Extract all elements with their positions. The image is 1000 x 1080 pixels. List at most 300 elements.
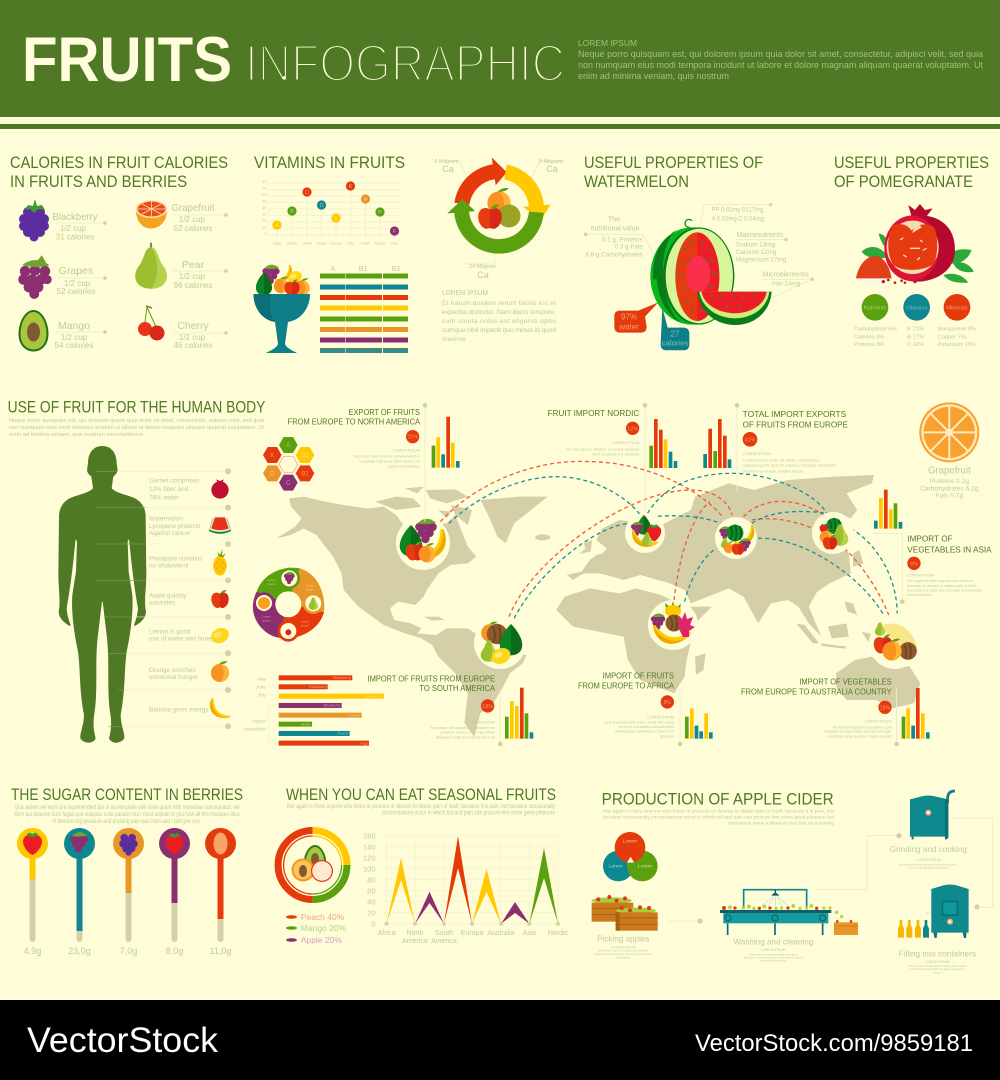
nutrition text: 6.8 g Carbohydrates bbox=[585, 251, 643, 258]
washing text: These cases are perfectly simple and easy to bbox=[748, 954, 799, 957]
grinding text: But in certain circumstances and owing to the claims bbox=[899, 863, 958, 866]
scatter chart: 80 bbox=[262, 180, 266, 184]
panel: fruit donut wheel: Lorem bbox=[301, 619, 310, 623]
heading: watermelon: WATERMELON bbox=[584, 173, 689, 191]
benefit texts: Apple quickly bbox=[149, 593, 187, 600]
callout: 27 calories: 27 bbox=[671, 329, 680, 338]
panel: export to north america bbox=[288, 403, 460, 522]
vitamins table: B1 bbox=[359, 266, 367, 273]
scatter chart: A bbox=[275, 223, 279, 229]
fruit labels: 1/2 cup bbox=[179, 272, 206, 281]
seasonal spike chart: 20 bbox=[367, 908, 376, 918]
panel: import of vegetables in asia: VEGETABLES IN ASIA bbox=[907, 544, 992, 554]
grinding text: LOREM IPSUM bbox=[916, 858, 941, 862]
callout: 27 calories bbox=[661, 308, 689, 350]
nutrition text: PP 0.01mg B117mg bbox=[712, 207, 764, 214]
callout: 97% water bbox=[614, 302, 658, 333]
cider intro text bbox=[603, 809, 835, 827]
heading: calories bbox=[10, 154, 228, 191]
nutrition text: Microelements bbox=[763, 272, 809, 279]
scatter chart: Kiwi bbox=[347, 242, 354, 246]
panel: import of vegetables in asia: circumstances bbox=[907, 593, 932, 597]
picking apples text: In inho piller hand, we do burca with righteous bbox=[598, 950, 649, 953]
benefit texts: emotional hunger bbox=[149, 674, 198, 681]
panel: export to north america: 21% bbox=[407, 435, 418, 441]
intro text: non numquam eius modi tempora incidunt ut labore et dolore magnam aliquam quaerat voluptatem. Ut bbox=[9, 425, 264, 431]
panel: import of vegetables to australia: Nemo enim ipsam voluptatem quia bbox=[833, 725, 892, 729]
fruit labels: 1/2 cup bbox=[179, 215, 206, 224]
cycle labels: Ca bbox=[477, 270, 489, 280]
scatter chart: 10 bbox=[262, 226, 266, 230]
panel: import of fruits to africa: 8% bbox=[663, 700, 671, 706]
panel: fruit donut wheel bbox=[253, 568, 324, 642]
scatter chart: Mango bbox=[375, 242, 385, 246]
icon: mango bbox=[18, 310, 48, 352]
donut legend: Mango 20% bbox=[301, 923, 347, 933]
sugar values: 7,0g bbox=[120, 946, 137, 956]
icon: blackberry bbox=[19, 199, 49, 242]
picking apples text: demoralized bbox=[617, 956, 631, 959]
scatter chart bbox=[262, 179, 400, 246]
nutrition text: 0.3 g Fats bbox=[615, 244, 643, 251]
spoon: raspberry bbox=[159, 828, 190, 942]
icon: banana bbox=[210, 698, 231, 718]
icon: apple crates bbox=[592, 895, 658, 931]
seasonal spike chart: 160 bbox=[363, 832, 376, 840]
benefit texts: 12% fiber and bbox=[149, 486, 189, 493]
panel: import of vegetables in asia: 6% bbox=[910, 561, 918, 567]
callout leader lines bbox=[55, 215, 226, 333]
panel: total import exports: Lorem ipsum dolor sit amet, consectetur bbox=[743, 458, 821, 463]
scatter chart: E bbox=[334, 216, 338, 222]
sugar text: illum qui dolorem eum fugiat quo voluptas nulla pariatur but I must explain to you how all this mistaken idea bbox=[14, 812, 240, 818]
panel: use of fruit for the human body bbox=[8, 398, 265, 743]
panel: vitamins in fruits bbox=[254, 154, 565, 353]
panel: import of vegetables to australia bbox=[741, 677, 930, 746]
icon: apple bbox=[211, 590, 229, 608]
intro text: enim ad minima veniam, quis nostrum exercitationem bbox=[9, 432, 144, 438]
panel: total import exports: LOREM IPSUM bbox=[743, 451, 771, 456]
callout: 97% water: water bbox=[618, 322, 639, 331]
panel: import of fruits to africa: aperiam bbox=[660, 734, 674, 738]
dashed trade routes bbox=[440, 461, 897, 618]
scatter chart: 60 bbox=[262, 193, 266, 197]
scatter chart: Apple bbox=[273, 242, 281, 246]
panel: vitamin hexagons: K bbox=[270, 453, 274, 459]
heading: calories: IN FRUITS AND BERRIES bbox=[10, 173, 187, 191]
scatter chart: K bbox=[349, 184, 353, 190]
cycle labels bbox=[434, 159, 563, 280]
heading: vitamins: VITAMINS IN FRUITS bbox=[254, 154, 405, 172]
nutrition text: Magnesium 17mg bbox=[736, 257, 787, 264]
panel: total import exports: adipiscing elit, sed do eiusmod tempor incididunt bbox=[743, 463, 837, 468]
washing text: LOREM IPSUM bbox=[761, 948, 786, 952]
panel: production of apple cider bbox=[592, 790, 993, 974]
intro text bbox=[9, 418, 265, 438]
panel: import of vegetables in asia: IMPORT OF bbox=[907, 534, 953, 544]
footer watermark bar bbox=[0, 1000, 1000, 1080]
panel: total import exports: ut labore et dolore magna aliqua. bbox=[743, 468, 804, 473]
panel: sugar content in berries bbox=[11, 786, 243, 956]
panel: import of fruits to africa: LOREM IPSUM bbox=[647, 715, 674, 719]
sugar text: Quis autem vel eum iure reprehenderit qui in ea voluptate velit esse quam nihil molestiae consequatur, vel bbox=[14, 805, 240, 811]
seasonal spike chart: Africa bbox=[378, 930, 396, 937]
nutrition text: Calcium 12mg bbox=[736, 249, 777, 256]
vitamins table: B2 bbox=[392, 266, 400, 273]
panel: export to north america: LOREM IPSUM bbox=[393, 449, 420, 453]
nutrition text: 0.1 g. Proteins bbox=[602, 237, 643, 244]
seasonal donut bbox=[278, 830, 347, 900]
panel: export to north america: Duis aute irure dolor in reprehenderit in bbox=[354, 455, 420, 459]
header intro text: LOREM IPSUM bbox=[578, 38, 637, 48]
washing text: Washing and cleaning bbox=[733, 937, 814, 947]
panel: vitamin hexagons: B2 bbox=[301, 471, 309, 477]
filling text: Filling into containers bbox=[899, 949, 976, 959]
benefit texts: Garnet comprises bbox=[149, 478, 199, 485]
header banner bbox=[0, 0, 1000, 129]
nutrition text: The bbox=[608, 217, 620, 224]
nutrition text: nutritional value bbox=[591, 226, 640, 233]
lorem text block: LOREM IPSUM bbox=[442, 288, 488, 297]
panel: import of vegetables in asia: pursues or desires to obtain pain of itself, bbox=[907, 584, 977, 588]
nutrition text: A 0.02mg C 0.04mg bbox=[712, 216, 764, 223]
venn diagram: Lorem bbox=[609, 863, 623, 869]
total bar chart bbox=[703, 419, 731, 468]
benefit texts: Against cancer bbox=[149, 530, 191, 537]
grinding text: Grinding and cooking bbox=[890, 844, 967, 854]
filling text: LOREM IPSUM bbox=[925, 960, 950, 964]
spoon: grape bbox=[64, 828, 95, 942]
footer watermark bar: VectorStock bbox=[27, 1021, 219, 1060]
nutrient values: B 17% bbox=[907, 334, 924, 340]
map fruit badge: australia bbox=[869, 617, 921, 669]
panel: fruit import nordic: No one rejects, dislikes, or avoids pleasure bbox=[567, 448, 639, 452]
scatter chart: 30 bbox=[262, 212, 266, 216]
panel: import of fruits to south america: Excepteur sint occaecat cupidatat non bbox=[430, 726, 495, 730]
seasonal spike chart: 80 bbox=[367, 876, 376, 884]
human silhouette bbox=[58, 446, 146, 743]
lorem text block: maxime bbox=[442, 336, 466, 343]
spoon: strawberry bbox=[17, 828, 48, 942]
washing text bbox=[733, 937, 814, 963]
panel: fruit donut wheel: ipsum bbox=[268, 582, 276, 586]
scatter chart: D bbox=[320, 203, 324, 209]
icon: cherries bbox=[138, 306, 164, 340]
fruit labels: 1/2 cup bbox=[61, 333, 88, 342]
seasonal spike chart: 0 bbox=[371, 920, 376, 928]
header intro text: enim ad minima veniam, quis nostrum bbox=[578, 71, 729, 82]
cider intro text: Nor again is there anyone who loves or pursues or desires to obtain pain of itself, because it is pain, but bbox=[603, 809, 835, 815]
panel: import of vegetables to australia: 18% bbox=[880, 705, 891, 711]
sugar values: 8,0g bbox=[166, 946, 183, 956]
nutrient values bbox=[854, 326, 976, 348]
seasonal spike chart: South bbox=[435, 930, 453, 937]
scatter chart: C bbox=[305, 190, 309, 196]
seasonal spike chart: 120 bbox=[363, 854, 376, 862]
nordic bar chart bbox=[649, 419, 677, 468]
panel: vitamin hexagons: C bbox=[286, 481, 291, 487]
callout: 97% water: 97% bbox=[621, 312, 637, 321]
panel: monthly fruit bars: Strawberry bbox=[332, 676, 351, 680]
title bbox=[22, 25, 565, 95]
nutrient values: Copper 7% bbox=[938, 334, 966, 340]
cider intro text: chooses to enjoy a pleasure that has no annoying bbox=[728, 821, 834, 827]
panel: import of fruits to africa: error sit voluptatem accusantium bbox=[619, 725, 674, 729]
seasonal spike chart: 100 bbox=[363, 864, 376, 874]
heading: seasonal: WHEN YOU CAN EAT SEASONAL FRUITS bbox=[286, 786, 556, 804]
panel: import of fruits to africa: Sed ut perspiciatis unde omnis iste natus bbox=[604, 720, 674, 724]
pomegranate illustration and nutrients bbox=[854, 204, 976, 348]
panel: vitamin hexagons: D bbox=[270, 471, 275, 477]
panel: vitamin hexagons: A bbox=[286, 443, 290, 449]
scatter chart: Orange bbox=[330, 242, 342, 246]
icon: grapefruit slice bbox=[919, 402, 979, 462]
panel: fruit donut wheel: Lorem bbox=[306, 583, 315, 587]
panel: import of vegetables to australia: voluptas sit aspernatur aut odit aut fugit, bbox=[824, 730, 892, 734]
scatter chart: 20 bbox=[262, 219, 266, 223]
panel: grapefruit: Carbohydrates 6.2g bbox=[920, 486, 979, 493]
panel: import of vegetables to australia: IMPORT OF VEGETABLES bbox=[799, 677, 892, 687]
nutrient values: Proteins 3% bbox=[854, 342, 884, 348]
benefit texts: Banana gives energy bbox=[149, 706, 209, 713]
nutrient values: Potassium 15% bbox=[938, 342, 976, 348]
filling text: to this principle of selection: he rejects pleasures to bbox=[909, 968, 966, 971]
panel: import of fruits to south america: proident, sunt in culpa qui officia bbox=[440, 731, 496, 735]
calcium cycle diagram bbox=[434, 158, 565, 280]
title: FRUITS bbox=[22, 25, 232, 95]
icon: watermelon wedge bbox=[209, 517, 231, 534]
benefit texts: saturates bbox=[149, 600, 175, 607]
heading: watermelon: USEFUL PROPERTIES OF bbox=[584, 154, 763, 172]
heading: pomegranate: OF POMEGRANATE bbox=[834, 173, 973, 191]
benefit texts: 76% water bbox=[149, 494, 179, 501]
panel: fruit import nordic: 12% bbox=[627, 426, 638, 432]
fruit labels: Cherry bbox=[177, 320, 209, 332]
seasonal text: circumstances occur in which toil and pain can procure him some great pleasure bbox=[382, 810, 556, 816]
fruit labels: Blackberry bbox=[52, 211, 98, 223]
vitamins table bbox=[320, 266, 408, 353]
scatter chart: 40 bbox=[262, 206, 266, 210]
scatter chart: Lemon bbox=[302, 242, 312, 246]
grinding text: of duty or the obligations of business bbox=[908, 866, 949, 869]
vitamins table: A bbox=[331, 266, 336, 273]
panel: import of fruits to south america: LOREM IPSUM bbox=[468, 720, 495, 724]
lorem text block: cumque nihil impedit quo minus id quod bbox=[442, 327, 556, 334]
panel: import of vegetables in asia: Nor again is there anyone who loves or bbox=[907, 579, 974, 583]
lorem text block bbox=[442, 288, 556, 343]
sugar values: 23,0g bbox=[68, 946, 91, 956]
panel: import of fruits to south america: 18% bbox=[482, 704, 493, 710]
panel: grapefruit: Grapefruit bbox=[928, 465, 971, 476]
icon: orange bbox=[211, 661, 229, 682]
nutrient values: C 10% bbox=[907, 342, 924, 348]
seasonal spike chart: Nordic bbox=[548, 930, 569, 937]
panel: vitamin hexagons: B1 bbox=[301, 453, 309, 459]
nutrient values: Calories 4% bbox=[854, 334, 884, 340]
icon: pear bbox=[135, 243, 167, 289]
seasonal spike chart: 40 bbox=[367, 898, 376, 906]
nutrient values: Manganese 8% bbox=[938, 326, 976, 332]
scatter chart: F bbox=[393, 229, 397, 235]
seasonal spike chart: Europa bbox=[461, 930, 483, 937]
panel: import of vegetables to australia: sed quia consequuntur magni dolores bbox=[828, 734, 892, 738]
scatter chart: B bbox=[290, 209, 294, 215]
panel: import of vegetables to australia: LOREM IPSUM bbox=[865, 719, 892, 723]
panel: export to north america: EXPORT OF FRUITS bbox=[349, 407, 420, 417]
venn diagram: Lorem bbox=[638, 863, 652, 869]
grinding text bbox=[890, 844, 967, 869]
header intro text: Neque porro quisquam est, qui dolorem ipsum quia dolor sit amet, consectetur, adipisci velit, sed quia bbox=[578, 49, 984, 60]
scatter chart: Banan bbox=[287, 242, 297, 246]
fruit labels: Pear bbox=[182, 259, 205, 271]
donut legend: Peach 40% bbox=[301, 912, 345, 922]
map fruit badge: north america bbox=[396, 516, 450, 570]
panel: fruit import nordic bbox=[548, 403, 647, 512]
map fruit badge: nordic bbox=[625, 513, 665, 553]
scatter chart: 0 bbox=[264, 232, 266, 236]
cycle labels: 34 Milgram bbox=[469, 264, 497, 270]
panel: import of vegetables in asia: because it is pain, but because occasionally bbox=[907, 589, 982, 593]
heading: cider: PRODUCTION OF APPLE CIDER bbox=[602, 790, 834, 808]
panel: monthly fruit bars: Peach bbox=[337, 732, 348, 736]
venn diagram: Lorem bbox=[623, 839, 637, 845]
panel: watermelon bbox=[584, 154, 814, 350]
intro text: Neque porro quisquam est, qui dolorem ipsum quia dolor sit amet, consectetur, adipisci velit, sed quia bbox=[9, 418, 265, 424]
panel: monthly fruit bars: Figs bbox=[360, 741, 368, 745]
panel: monthly fruit bars: August bbox=[251, 718, 267, 723]
seasonal spike chart: America bbox=[431, 938, 457, 945]
nutrient circles: Minerals bbox=[946, 305, 968, 311]
scatter chart: H bbox=[364, 197, 368, 203]
panel: monthly fruit bars: July bbox=[258, 693, 267, 698]
panel: monthly fruit bars bbox=[243, 675, 384, 746]
nutrient circles bbox=[862, 294, 970, 321]
panel: import of fruits to south america: deserunt mollit anim id est laborum bbox=[436, 735, 495, 739]
watermelon slice bbox=[697, 292, 772, 325]
nutrient values: Carbohydrate 6% bbox=[854, 326, 897, 332]
icon: cooking tank bbox=[910, 791, 955, 839]
picking apples text bbox=[594, 934, 653, 959]
benefit texts: Orange enriches bbox=[149, 667, 196, 674]
seasonal spike chart: Australia bbox=[487, 930, 515, 937]
nutrition text: Iron 14mg bbox=[772, 281, 801, 288]
panel: fruit import nordic: itself, because it is pleasure bbox=[592, 453, 639, 457]
filling text bbox=[899, 949, 976, 974]
icon: fruit bowl goblet bbox=[254, 265, 310, 353]
map fruit badge: east asia bbox=[812, 512, 854, 554]
panel: grapefruit bbox=[919, 402, 979, 500]
scatter chart: P bbox=[378, 210, 382, 216]
benefit texts: Lemon is good bbox=[149, 629, 191, 636]
panel: fruit donut wheel: Lorem bbox=[262, 615, 271, 619]
panel: grapefruit: Proteins 0.2g bbox=[930, 478, 969, 485]
panel: monthly fruit bars: Blackberry bbox=[365, 694, 383, 698]
fruit labels: 52 calories bbox=[57, 287, 95, 296]
benefit texts: Lycopene protects bbox=[149, 523, 200, 530]
header intro text: non numquam eius modi tempora incidunt ut labore et dolore magnam aliquam quaerat voluptatem. Ut bbox=[578, 60, 983, 71]
body leader lines and dots bbox=[96, 468, 231, 729]
scatter chart: Banan bbox=[317, 242, 327, 246]
seasonal text: Nor again is there anyone who loves or pursues or desires to obtain pain of itself, because it is pain, but because occasionally bbox=[287, 804, 555, 810]
watermelon illustration and callouts bbox=[584, 203, 814, 350]
panel: fruit donut wheel: ipsum bbox=[301, 623, 309, 627]
panel: import of vegetables to australia: FROM EUROPE TO AUSTRALIA COUNTRY bbox=[741, 687, 892, 697]
cycle labels: 9 Milgram bbox=[539, 159, 563, 165]
picking apples text: Picking apples bbox=[597, 934, 649, 944]
venn diagram bbox=[603, 832, 658, 881]
footer watermark bar: VectorStock.com/9859181 bbox=[695, 1030, 973, 1057]
panel: pomegranate bbox=[834, 154, 989, 348]
donut legend bbox=[286, 912, 347, 945]
fruit labels: 1/2 cup bbox=[179, 333, 206, 342]
panel: fruit import nordic: LOREM IPSUM bbox=[612, 441, 639, 445]
benefit texts: no cholesterol bbox=[149, 562, 188, 569]
seasonal spike chart: Asia bbox=[523, 930, 536, 937]
cycle labels: Ca bbox=[442, 164, 454, 174]
icon: lemon bbox=[209, 625, 231, 646]
header intro text bbox=[578, 38, 984, 82]
benefit texts: Watermelon bbox=[149, 516, 183, 523]
seasonal spike chart bbox=[363, 832, 569, 945]
sugar values: 11,0g bbox=[210, 946, 231, 956]
icon: pineapple bbox=[213, 549, 227, 576]
panel: fruit import nordic: FRUIT IMPORT NORDIC bbox=[548, 408, 639, 418]
scatter chart: Peach bbox=[361, 242, 370, 246]
panel: total import exports: TOTAL IMPORT EXPORTS bbox=[743, 409, 847, 419]
panel: seasonal fruits bbox=[278, 786, 569, 945]
cycle labels: 6 Milgram bbox=[434, 159, 459, 165]
panel: monthly fruit bars: May bbox=[257, 677, 267, 682]
sugar values: 4,9g bbox=[24, 946, 41, 956]
panel: import of fruits to africa: doloremque laudantium, totam rem bbox=[615, 729, 674, 733]
filling text: secure bbox=[934, 971, 942, 974]
scatter chart: Pear bbox=[391, 242, 399, 246]
picking apples text: indignation and dislike men who are so beguiled and bbox=[594, 953, 653, 956]
fruit labels: 1/2 cup bbox=[64, 279, 91, 288]
panel: total import exports: OF FRUITS FROM EUROPE bbox=[743, 420, 848, 430]
lorem text block: Et harum quidem rerum facilis est et bbox=[442, 300, 556, 307]
panel: fruit donut wheel: ipsum bbox=[263, 619, 271, 623]
icon: grapes bbox=[18, 255, 52, 299]
seasonal spike chart: 140 bbox=[363, 842, 376, 852]
lorem text block: cum soluta nobis est eligendi optio bbox=[442, 318, 556, 325]
panel: export to north america: FROM EUROPE TO NORTH AMERICA bbox=[288, 417, 420, 427]
benefit texts: Pineapple contains bbox=[149, 555, 202, 562]
heading: pomegranate bbox=[834, 154, 989, 191]
panel: export to north america: voluptate velit esse cillum dolore eu bbox=[360, 460, 420, 464]
benefit texts: use of water and honey bbox=[149, 636, 216, 643]
panel: fruit donut wheel: Lorem bbox=[267, 578, 276, 582]
title: INFOGRAPHIC bbox=[245, 35, 565, 93]
washing text: distinguish. In a free hour, when our power of choice is bbox=[743, 957, 804, 960]
panel: export to north america: fugiat nulla pariatur bbox=[387, 464, 421, 468]
cycle labels: Ca bbox=[546, 164, 558, 174]
heading: sugar: THE SUGAR CONTENT IN BERRIES bbox=[11, 786, 243, 804]
filling text: The wise man therefore always holds in these matters bbox=[908, 965, 968, 968]
seasonal spike chart: 60 bbox=[367, 886, 376, 896]
scatter chart: 50 bbox=[262, 200, 266, 204]
spoon: melon bbox=[205, 828, 236, 942]
fruit labels: Mango bbox=[58, 320, 90, 332]
panel: monthly fruit bars: September bbox=[243, 726, 266, 731]
fruit labels: 31 calories bbox=[56, 232, 94, 242]
fruit labels: Grapes bbox=[59, 265, 93, 277]
panel: monthly fruit bars: Raspberry bbox=[309, 685, 327, 689]
nutrient values: K 21% bbox=[907, 326, 924, 332]
nutrition text: Macronutrients bbox=[737, 232, 784, 239]
nutrition text: Sodium 14mg bbox=[736, 241, 776, 248]
nutrient circles: Nutrients bbox=[864, 305, 886, 311]
